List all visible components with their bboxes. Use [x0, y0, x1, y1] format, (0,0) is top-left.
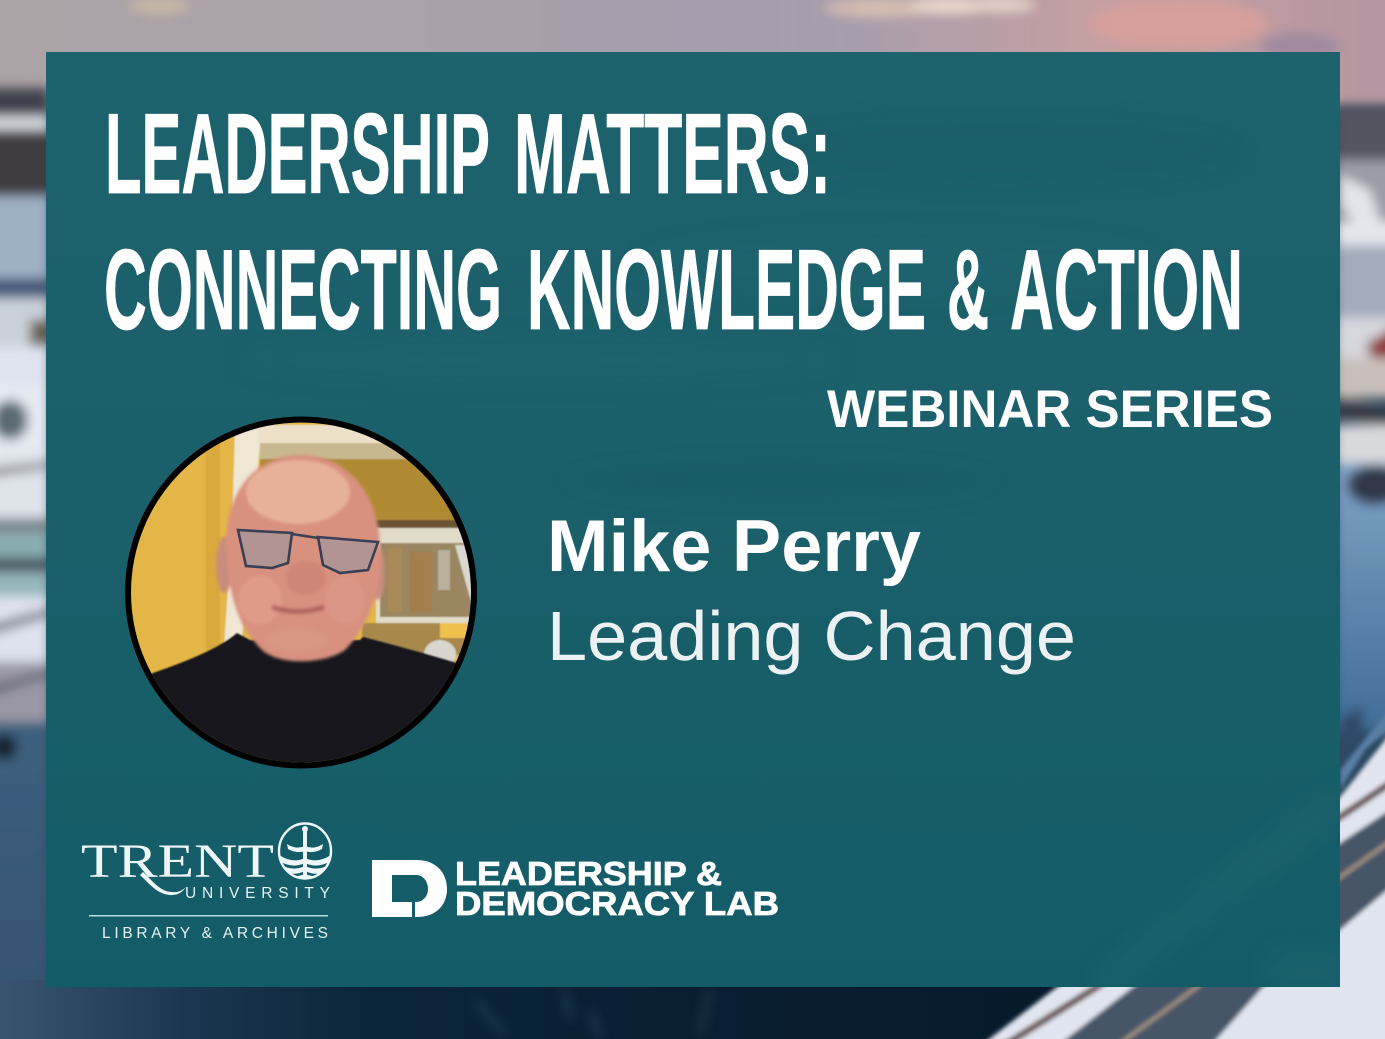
- logo mark: LD monogram: [372, 860, 447, 917]
- title: line two: &: [947, 227, 989, 354]
- background: snowy road embankment: [975, 690, 1385, 1039]
- background: left shore bands: [0, 88, 50, 992]
- title: line two: [104, 227, 1243, 354]
- portrait glasses: [238, 530, 378, 573]
- logo wordmark: Trent: TRENT: [81, 835, 274, 888]
- logo divider line: [89, 915, 328, 916]
- background: right shore bands: [1335, 106, 1385, 775]
- logo text: Leadership &: LEADERSHIP &: [455, 855, 722, 892]
- background: sky: [0, 0, 1385, 108]
- portrait head: [216, 455, 385, 661]
- background: dark water below panel: [0, 980, 1090, 1039]
- title: line two: KNOWLEDGE: [527, 227, 926, 354]
- title: line one: MATTERS:: [514, 91, 831, 218]
- talk title: Leading Change: [547, 597, 1076, 675]
- title: line one: LEADERSHIP: [105, 91, 490, 218]
- speaker name: Mike Perry: [547, 506, 921, 587]
- speaker portrait: [120, 410, 485, 780]
- subtitle: webinar series: WEBINAR SERIES: [827, 380, 1273, 439]
- logo emblem: shield with sword and waves: [279, 824, 331, 882]
- logo: Leadership & Democracy Lab: [372, 855, 779, 922]
- logo text: University: UNIVERSITY: [185, 885, 330, 902]
- panel: faint photo texture showing through: [240, 120, 1350, 990]
- title: line two: CONNECTING: [104, 227, 502, 354]
- logo swash: R tail: [140, 872, 186, 895]
- portrait shirt: [151, 632, 456, 762]
- logo text: Library & Archives: LIBRARY & ARCHIVES: [102, 925, 328, 942]
- portrait backdrop: [131, 422, 471, 762]
- logo text: Democracy Lab: DEMOCRACY LAB: [455, 885, 779, 922]
- logo: Trent University Library & Archives: [81, 824, 331, 942]
